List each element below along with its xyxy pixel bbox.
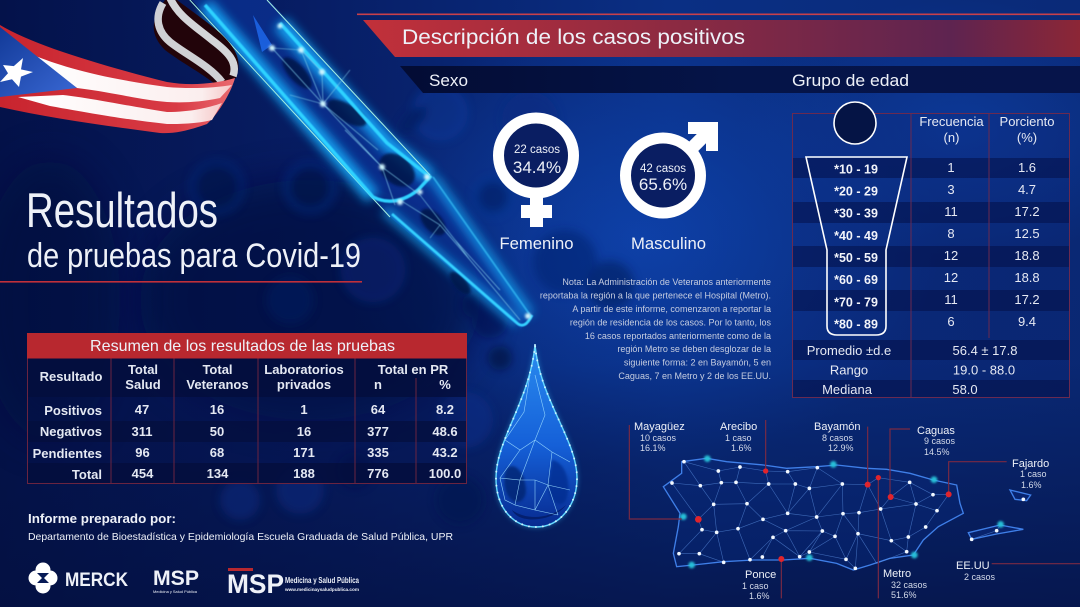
section header bar — [400, 66, 1080, 93]
table headers: Total — [202, 362, 233, 377]
table headers — [40, 362, 451, 392]
label: Bayamón — [814, 421, 860, 453]
percent column: 17.2 — [1014, 204, 1040, 219]
percent column: 1.6 — [1018, 160, 1036, 175]
summary statistics: Mediana — [822, 382, 873, 397]
dark inner blobs — [278, 53, 474, 297]
table rows: 96 — [135, 445, 150, 460]
table rows: 377 — [367, 424, 389, 439]
table rows: 134 — [207, 466, 229, 481]
glass thin edges — [188, 0, 430, 217]
credits: Informe preparado por: — [28, 511, 176, 526]
table stripes and grid — [792, 113, 1070, 398]
table rows: 188 — [293, 466, 315, 481]
table rows: 311 — [132, 424, 152, 439]
title: de pruebas para Covid-19 — [27, 237, 361, 275]
logo: MSP small: MSP — [153, 567, 199, 590]
table rows: Total — [72, 467, 102, 482]
age table — [792, 102, 1070, 398]
frequency column: 8 — [947, 226, 955, 241]
summary statistics: Rango — [830, 362, 868, 378]
age labels: *10 - 19 — [834, 162, 878, 176]
table rows: 48.6 — [432, 424, 458, 439]
summary statistics: 56.4 ± 17.8 — [953, 343, 1017, 358]
label: Metro: 32 casos — [891, 580, 928, 590]
callout lines — [629, 420, 1080, 598]
note: región de residencia de los casos. Por lo tanto, los — [570, 318, 771, 328]
frequency column: (n) — [944, 130, 959, 145]
note: A partir de este informe, comenzaron a reportar la — [572, 304, 771, 314]
label: EE.UU: 2 casos — [964, 572, 996, 582]
icon: female — [498, 118, 574, 253]
table body — [27, 358, 467, 484]
table title — [27, 333, 467, 358]
logo: MSP small: Medicina y Salud Pública — [153, 589, 198, 594]
frequency column: 3 — [947, 182, 955, 197]
label: Arecibo — [720, 421, 757, 453]
percent column: 9.4 — [1018, 314, 1036, 329]
section header bar: Sexo — [429, 71, 468, 90]
percent column: 18.8 — [1014, 270, 1040, 285]
age labels — [834, 162, 878, 332]
note: Nota: La Administración de Veteranos anteriormente — [562, 277, 771, 287]
percent column: (%) — [1017, 130, 1037, 145]
icon: male: 42 casos — [640, 163, 686, 175]
blue triangle — [0, 27, 77, 97]
note — [540, 277, 771, 381]
label: Arecibo: 1.6% — [731, 443, 752, 453]
label: Metro: Metro — [883, 568, 911, 580]
logo: MSP large: Medicina y Salud Pública — [285, 576, 359, 585]
icon: female: 22 casos — [514, 144, 560, 156]
label: Ponce: 1.6% — [749, 591, 770, 601]
label: Caguas — [917, 425, 956, 457]
icon: female: Femenino — [500, 234, 574, 253]
glowing edges — [205, 5, 532, 325]
note: Caguas, 7 en Metro y 2 de los EE.UU. — [618, 371, 771, 381]
red region nodes — [695, 468, 952, 562]
table headers: Laboratorios — [264, 362, 344, 377]
icon: male: 65.6% — [639, 175, 687, 194]
table headers: % — [439, 377, 451, 392]
table rows: 47 — [135, 402, 149, 417]
icon: drop — [496, 345, 577, 527]
logo: Merck — [28, 562, 128, 594]
table rows — [33, 402, 461, 482]
label: Caguas: 9 casos — [924, 436, 956, 446]
frequency column: 6 — [947, 314, 955, 329]
table rows: 50 — [210, 424, 224, 439]
label: Metro — [883, 568, 928, 600]
table rows: Negativos — [40, 424, 102, 439]
age labels: *30 - 39 — [834, 206, 878, 220]
table rows: 454 — [132, 466, 154, 481]
icon: male: Masculino — [631, 234, 706, 253]
age labels: *60 - 69 — [834, 273, 878, 287]
note: siguiente forma: 2 en Bayamón, 5 en — [624, 358, 771, 368]
label: Bayamón: 12.9% — [828, 443, 854, 453]
percent column: 17.2 — [1014, 292, 1040, 307]
label: Fajardo: 1.6% — [1021, 480, 1042, 490]
mesh lines — [672, 462, 1001, 568]
icon: person body — [806, 157, 907, 335]
age labels: *40 - 49 — [834, 229, 878, 243]
label: Bayamón: Bayamón — [814, 421, 860, 433]
label: Arecibo: 1 caso — [725, 433, 752, 443]
age labels: *50 - 59 — [834, 251, 878, 265]
table rows: 16 — [210, 402, 224, 417]
map of Puerto Rico — [629, 420, 1080, 598]
frequency column: 11 — [944, 292, 958, 307]
frequency column: 1 — [947, 160, 955, 175]
percent column: Porciento — [1000, 114, 1054, 129]
percent column: 18.8 — [1014, 248, 1040, 263]
label: EE.UU: EE.UU — [956, 560, 990, 572]
Vieques and Culebra — [968, 490, 1031, 539]
logo: MSP large — [227, 568, 359, 599]
label: Bayamón: 8 casos — [822, 433, 854, 443]
credits — [28, 511, 453, 543]
note: reportaba la región a la que pertenece el Hospital (Metro). — [540, 290, 771, 300]
logo: Merck: MERCK — [65, 570, 128, 591]
results table — [27, 333, 467, 484]
frequency column — [919, 114, 984, 329]
icon: male — [626, 122, 718, 253]
percent column — [1000, 114, 1054, 329]
table headers: privados — [277, 377, 331, 392]
label: Arecibo: Arecibo — [720, 421, 757, 433]
table headers: Total — [128, 362, 158, 377]
frequency column: 12 — [944, 270, 958, 285]
icon: female: 34.4% — [513, 158, 561, 177]
table rows: 16 — [297, 424, 311, 439]
table rows: Pendientes — [33, 446, 102, 461]
frequency column: Frecuencia — [919, 114, 984, 129]
credits: Departamento de Bioestadística y Epidemiología Escuela Graduada de Salud Pública, UPR — [28, 531, 453, 543]
table rows: 43.2 — [432, 445, 458, 460]
table title: Resumen de los resultados de las pruebas — [90, 338, 395, 355]
table headers: Salud — [125, 377, 161, 392]
title: Resultados — [26, 184, 218, 238]
percent column: 12.5 — [1014, 226, 1040, 241]
frequency column: 12 — [944, 248, 958, 263]
label: Fajardo — [1012, 458, 1049, 490]
table rows: 64 — [371, 402, 386, 417]
section header bar: Grupo de edad — [792, 71, 909, 90]
white nodes — [670, 460, 1025, 570]
label: Mayagüez — [634, 421, 685, 453]
logo: MSP large: www.medicinaysaludpublica.com — [284, 587, 359, 592]
table rows: 100.0 — [429, 466, 461, 481]
white stripes — [18, 55, 232, 124]
label: Mayagüez: 10 casos — [640, 433, 677, 443]
cyan glow nodes — [680, 455, 1004, 568]
title — [26, 184, 361, 275]
table headers: n — [374, 377, 382, 392]
label: Metro: 51.6% — [891, 590, 917, 600]
table rows: 8.2 — [436, 402, 454, 417]
logo: MSP large: MSP — [227, 569, 284, 599]
table headers: Total en PR — [378, 362, 449, 377]
dropper glow nodes — [269, 24, 531, 319]
dropper — [188, 0, 532, 329]
summary statistics: 19.0 - 88.0 — [953, 362, 1015, 378]
label: Ponce: 1 caso — [742, 581, 769, 591]
ribbon front — [0, 25, 235, 133]
percent column: 4.7 — [1018, 182, 1036, 197]
label: Mayagüez: 16.1% — [640, 443, 666, 453]
note: región Metro se deben desglozar de la — [617, 344, 771, 354]
age labels: *70 - 79 — [834, 296, 878, 310]
header banner: Descripción de los casos positivos — [402, 25, 745, 49]
label: Caguas: Caguas — [917, 425, 955, 437]
table rows: 1 — [300, 402, 308, 417]
icon: person head — [834, 102, 876, 144]
table rows: Positivos — [44, 403, 102, 418]
summary statistics: 58.0 — [952, 382, 978, 397]
table rows: 776 — [367, 466, 389, 481]
note: 16 casos reportados anteriormente como de la — [585, 331, 771, 341]
table headers: Veteranos — [186, 377, 249, 392]
label: Ponce: Ponce — [745, 569, 776, 581]
label: Caguas: 14.5% — [924, 447, 950, 457]
table headers: Resultado — [40, 369, 102, 384]
summary statistics — [807, 343, 1017, 397]
summary statistics: Promedio ±d.e — [807, 343, 891, 358]
frequency column: 11 — [944, 204, 958, 219]
age labels: *20 - 29 — [834, 184, 878, 198]
label: EE.UU — [956, 560, 996, 582]
table rows: 335 — [367, 445, 389, 460]
star — [0, 58, 33, 87]
label: Mayagüez: Mayagüez — [634, 421, 685, 433]
label: Fajardo: 1 caso — [1020, 469, 1047, 479]
age labels: *80 - 89 — [834, 318, 878, 332]
table rows: 68 — [210, 445, 224, 460]
label: Fajardo: Fajardo — [1012, 458, 1049, 470]
table rows: 171 — [293, 445, 315, 460]
island outline — [663, 458, 963, 570]
label: Ponce — [742, 569, 776, 601]
flag ribbon — [0, 0, 239, 133]
ribbon back fold — [154, 0, 239, 84]
header banner — [357, 14, 1080, 57]
